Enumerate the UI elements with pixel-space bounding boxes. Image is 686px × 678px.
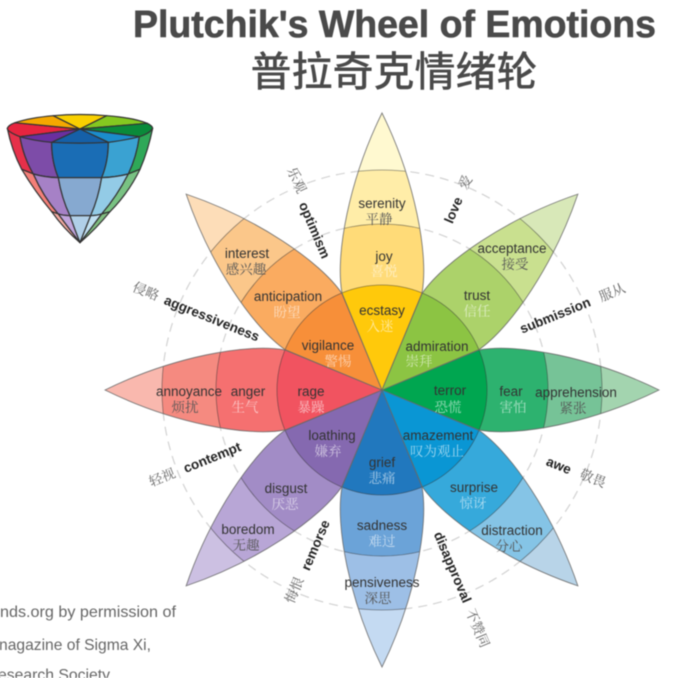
emotion labels: loathing [308,428,356,443]
dyad labels: aggressiveness [162,293,262,344]
emotion labels: 信任 [464,304,491,319]
emotion labels: vigilance [302,338,354,353]
petal: anger family [104,347,382,433]
emotion labels: 警惕 [324,353,352,369]
credit text: nds.org by permission of [0,604,177,621]
credit text: nagazine of Sigma Xi, [0,637,151,654]
petal: joy family [339,112,425,390]
dyad labels [130,165,628,650]
dyad labels: optimism [296,200,333,261]
emotion labels: rage [297,384,325,399]
emotion labels: disgust [265,481,308,496]
emotion labels: grief [369,455,395,470]
petal: trust family [382,193,579,390]
emotion labels: 叹为观止 [410,443,464,459]
emotion labels: 悲痛 [368,470,396,486]
emotion labels: 无趣 [232,537,260,553]
emotion labels: 难过 [368,534,396,549]
petal: fear family [382,347,660,433]
dyad labels: 不赞同 [463,606,493,650]
emotion labels: 感兴趣 [226,261,267,277]
dyad labels: disapproval [431,529,474,605]
emotion wheel [104,112,660,668]
emotion labels: terror [434,383,467,398]
emotion labels: amazement [403,428,474,443]
emotion labels: 平静 [366,212,393,227]
petal: surprise family [382,390,579,587]
emotion labels: distraction [481,523,543,538]
dashed guide circles [162,170,602,610]
emotion labels: 生气 [232,399,259,415]
petal: anticipation family [185,193,382,390]
emotion labels: 分心 [496,539,523,554]
petal: sadness family [339,390,425,668]
dyad labels: submission [518,294,593,336]
emotion labels: 暴躁 [298,400,325,415]
emotion labels: 入迷 [366,319,394,334]
dyad labels: 服从 [597,280,628,304]
emotion labels: surprise [450,480,498,495]
emotion labels: annoyance [156,384,222,399]
dyad labels: contempt [181,439,244,476]
dyad labels: 乐观 [284,165,309,196]
emotion labels: anger [231,384,266,399]
emotion labels: pensiveness [344,575,420,590]
emotion labels: sadness [357,518,407,533]
emotion labels: serenity [358,196,406,211]
emotion labels: admiration [405,339,469,354]
dyad labels: 侵略 [130,279,162,304]
dyad labels: awe [544,454,574,477]
emotion labels: interest [225,246,269,261]
emotion labels: 接受 [502,256,529,272]
emotion labels: 深思 [364,591,392,606]
emotion labels: acceptance [477,241,547,256]
dyad labels: 轻视 [147,465,178,489]
emotion labels: 崇拜 [406,353,433,369]
credit text [0,604,177,678]
emotion labels [156,196,617,606]
emotion labels: anticipation [254,289,322,304]
petal: disgust family [185,390,382,587]
dyad labels: 敬畏 [577,466,609,490]
emotion labels: joy [374,249,393,264]
emotion labels: 恐慌 [434,399,462,415]
dyad labels: 悔恨 [281,574,307,606]
emotion labels: 紧张 [560,400,587,416]
emotion labels: 盼望 [274,304,300,320]
dyad labels: 爱 [456,173,475,192]
emotion labels: 害怕 [500,399,526,415]
emotion labels: trust [464,288,490,303]
emotion labels: 惊讶 [460,495,487,511]
emotion labels: 嫌弃 [314,444,342,459]
emotion labels: ecstasy [359,303,405,318]
emotion labels: 喜悦 [370,263,398,279]
emotion labels: apprehension [535,385,617,400]
title: Chinese: 普拉奇克情绪轮 [250,49,538,95]
emotion labels: 烦扰 [172,399,199,415]
title: English: Plutchik's Wheel of Emotions [133,4,656,46]
dyad labels: remorse [298,517,333,573]
icon: 3D cone model of emotions [7,114,153,243]
dyad labels: love [441,194,466,226]
emotion labels: 厌恶 [272,497,299,512]
emotion labels: boredom [221,522,275,537]
emotion labels: fear [499,384,523,399]
